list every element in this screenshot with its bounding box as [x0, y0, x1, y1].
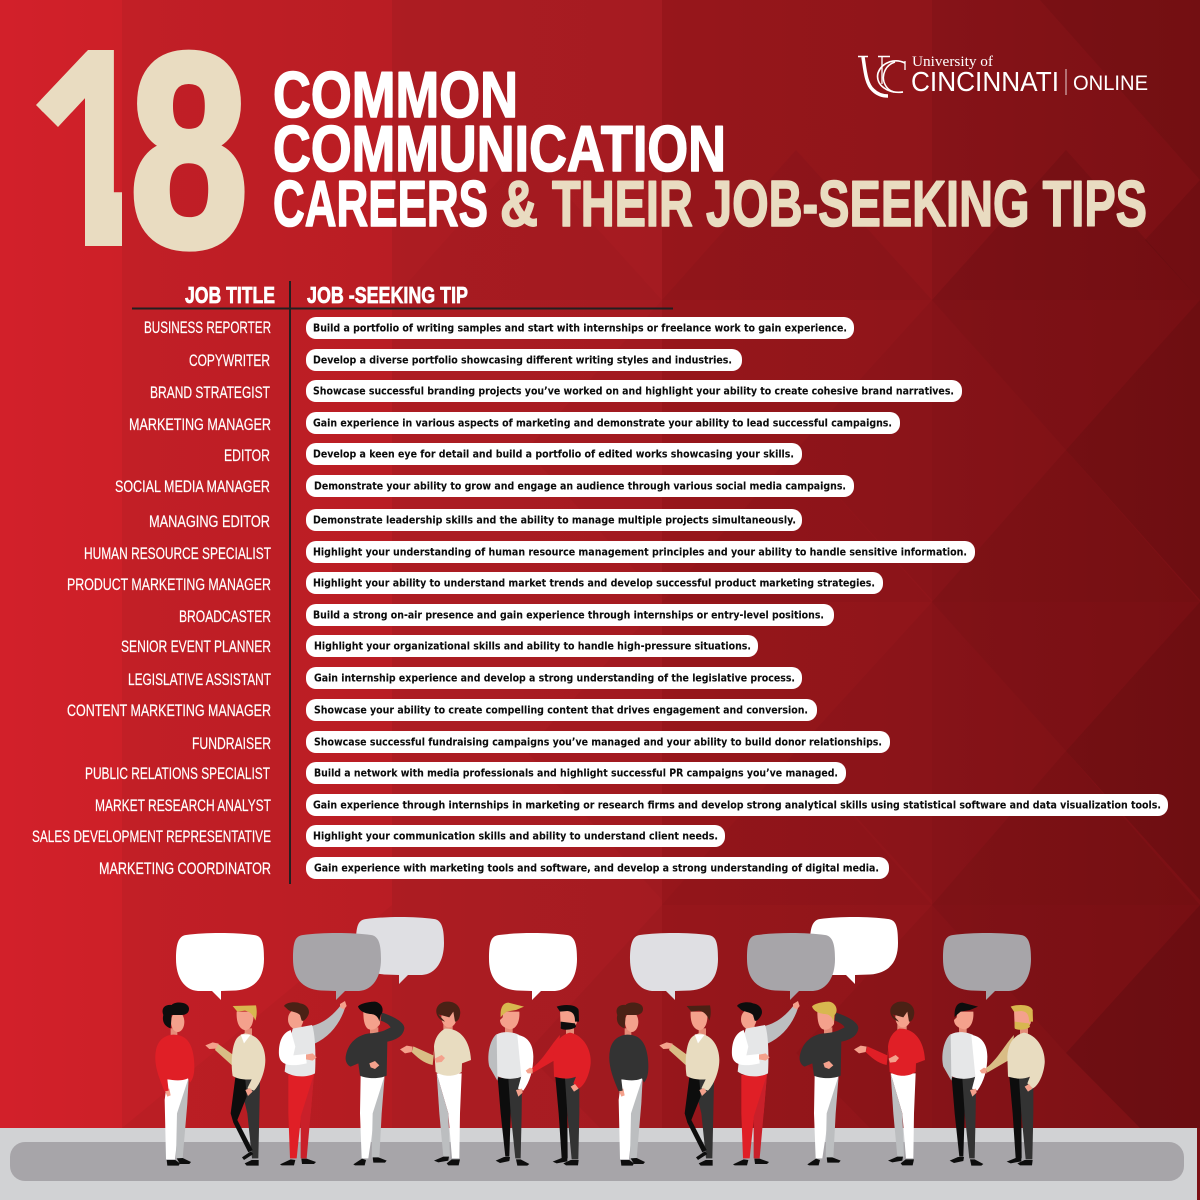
row: human resource specialist: Highlight your understanding of human resource management principles and your ability to handle sensitive information.: [313, 546, 967, 558]
row: sales development representative: SALES DEVELOPMENT REPRESENTATIVE: [32, 828, 271, 846]
title line: careers: CAREERS: [273, 167, 488, 240]
row: marketing manager: Gain experience in various aspects of marketing and demonstrate your ability to lead successful campaigns.: [313, 418, 892, 430]
title: [273, 58, 1147, 240]
logo text: cincinnati: CINCINNATI: [911, 66, 1059, 97]
row: fundraiser: [192, 731, 890, 753]
title line: common: COMMON: [273, 58, 518, 131]
logo divider: [1066, 69, 1067, 95]
person 7: red sweater bearded: [526, 1005, 591, 1165]
row: marketing coordinator: MARKETING COORDINATOR: [99, 860, 271, 878]
row: market research analyst: [95, 794, 1168, 816]
row: market research analyst: MARKET RESEARCH ANALYST: [95, 797, 271, 815]
speech bubble 2: [293, 933, 381, 1000]
row: managing editor: [149, 509, 802, 531]
row: editor: EDITOR: [224, 447, 270, 465]
person 10: white sweater arm raised: [732, 1001, 800, 1165]
row: brand strategist: BRAND STRATEGIST: [150, 384, 270, 402]
row: senior event planner: Highlight your organizational skills and ability to handle high-pressure situations.: [314, 640, 751, 652]
digit 8: 8: [130, 0, 248, 304]
row: public relations specialist: Build a network with media professionals and highlight successful PR campaigns you’ve managed.: [314, 768, 838, 780]
row: managing editor: Demonstrate leadership skills and the ability to manage multiple projects simultaneously.: [313, 514, 796, 526]
row: senior event planner: SENIOR EVENT PLANNER: [121, 638, 271, 656]
row: public relations specialist: PUBLIC RELATIONS SPECIALIST: [85, 765, 270, 783]
row: broadcaster: BROADCASTER: [179, 608, 271, 626]
title ampersand: &: [500, 167, 538, 240]
person 9: beige sweater pointing: [659, 1005, 719, 1166]
row: content marketing manager: [67, 699, 817, 721]
row: human resource specialist: HUMAN RESOURCE SPECIALIST: [84, 545, 271, 563]
row: social media manager: [115, 475, 854, 497]
row: legislative assistant: Gain internship experience and develop a strong understanding of the legislative process.: [314, 672, 795, 684]
person 1: red sweater: [155, 1003, 194, 1166]
column heading: job-seeking tip: JOB -SEEKING TIP: [307, 282, 468, 308]
row: marketing coordinator: Gain experience with marketing tools and software, and develop a strong understanding of digital media.: [314, 862, 879, 874]
row: product marketing manager: Highlight your ability to understand market trends and develop successful product marketing strategies.: [313, 578, 875, 590]
logo text: university of: University of: [912, 54, 993, 70]
row: content marketing manager: CONTENT MARKETING MANAGER: [67, 702, 271, 720]
table horizontal rule: [132, 308, 673, 310]
row: product marketing manager: PRODUCT MARKETING MANAGER: [67, 576, 271, 594]
column heading: job title: JOB TITLE: [185, 282, 275, 308]
person 4: black sweater scratching head: [346, 1002, 404, 1165]
row: business reporter: [144, 317, 854, 339]
table vertical rule: [289, 281, 291, 884]
row: content marketing manager: Showcase your ability to create compelling content that drives engagement and conversion.: [314, 704, 808, 716]
row: product marketing manager: [67, 572, 883, 594]
floor: [0, 1128, 1197, 1200]
row: brand strategist: Showcase successful branding projects you’ve worked on and highlight your ability to create cohesive brand narratives.: [313, 386, 954, 398]
table: [32, 281, 1168, 884]
row: sales development representative: [32, 825, 725, 847]
row: sales development representative: Highlight your communication skills and ability to understand client needs.: [313, 830, 718, 842]
person 8: black sweater: [609, 1003, 648, 1166]
row: senior event planner: [121, 635, 758, 657]
big number 18: [36, 50, 245, 252]
speech bubble 8: [943, 933, 1031, 1000]
row: broadcaster: [179, 604, 834, 626]
row: marketing coordinator: [99, 857, 889, 879]
person 11: black sweater scratching head: [800, 1002, 858, 1165]
speech bubbles: [176, 917, 1031, 1000]
person 13: white sweater dark trousers: [942, 1003, 987, 1166]
speech bubble 7: [810, 917, 898, 984]
icon: UC monogram: [858, 56, 905, 96]
person 6: white sweater dark trousers: [488, 1003, 533, 1166]
row: marketing manager: [129, 412, 900, 434]
row: managing editor: MANAGING EDITOR: [149, 513, 270, 531]
row: marketing manager: MARKETING MANAGER: [129, 416, 271, 434]
person 14: beige sweater bearded: [980, 1005, 1045, 1165]
person 12: red sweater gesturing: [854, 1002, 925, 1165]
row: business reporter: BUSINESS REPORTER: [144, 319, 271, 337]
speech bubble 5: [630, 933, 718, 1000]
row: human resource specialist: [84, 541, 975, 563]
row: brand strategist: [150, 380, 962, 402]
row: social media manager: Demonstrate your ability to grow and engage an audience through various social media campaigns.: [314, 480, 846, 492]
speech bubble 1: [176, 933, 264, 1000]
row: legislative assistant: [128, 667, 802, 689]
row: fundraiser: FUNDRAISER: [192, 735, 271, 753]
person 3: white sweater arm raised: [279, 1001, 347, 1165]
row: social media manager: SOCIAL MEDIA MANAGER: [115, 478, 270, 496]
speech bubble 3: [356, 917, 444, 984]
row: legislative assistant: LEGISLATIVE ASSISTANT: [128, 671, 271, 689]
row: fundraiser: Showcase successful fundraising campaigns you’ve managed and your ability to build donor relationships.: [314, 736, 882, 748]
logo: University of Cincinnati Online: [858, 54, 1148, 97]
title line: communication: COMMUNICATION: [273, 112, 726, 185]
row: copywriter: [189, 349, 742, 371]
row: business reporter: Build a portfolio of writing samples and start with internships or freelance work to gain experience.: [313, 322, 847, 334]
person 2: beige sweater pointing: [205, 1005, 265, 1166]
row: broadcaster: Build a strong on-air presence and gain experience through internships or entry-level positions.: [313, 610, 824, 622]
logo text: online: ONLINE: [1073, 72, 1148, 95]
person 5: beige sweater gesturing: [400, 1002, 471, 1165]
row: copywriter: Develop a diverse portfolio showcasing different writing styles and industries.: [313, 354, 732, 366]
row: copywriter: COPYWRITER: [189, 352, 270, 370]
speech bubble 4: [489, 933, 577, 1000]
people: [155, 1001, 1045, 1166]
digit 1: 1: [28, 0, 132, 306]
row: editor: [224, 443, 802, 465]
row: editor: Develop a keen eye for detail and build a portfolio of edited works showcasing your skills.: [313, 448, 794, 460]
speech bubble 6: [747, 933, 835, 1000]
row: public relations specialist: [85, 762, 846, 784]
